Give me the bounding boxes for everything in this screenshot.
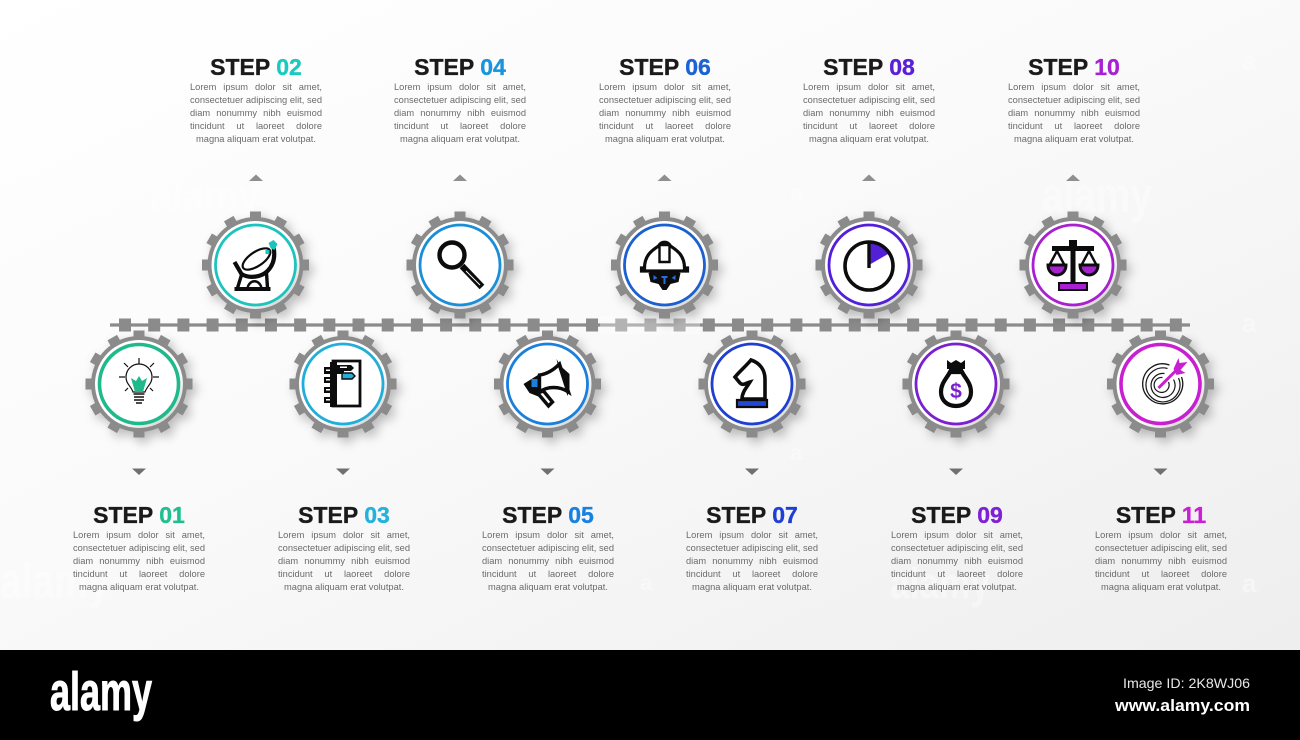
step 06 body: consectetuer adipiscing elit, sed — [599, 95, 731, 105]
step 11 text block — [1095, 502, 1227, 592]
step 01 body: Lorem ipsum dolor sit amet, — [73, 530, 205, 540]
step 07 heading: STEP 07 — [706, 502, 798, 528]
step 01 body — [73, 530, 205, 592]
gear 09 — [902, 330, 1010, 438]
step 08 body: diam nonummy nibh euismod — [803, 108, 935, 118]
watermark: a — [1242, 308, 1257, 338]
gear 05 — [494, 330, 601, 438]
step 02 body: consectetuer adipiscing elit, sed — [190, 95, 322, 105]
watermark: alamy — [1042, 167, 1152, 223]
step 06 body: magna aliquam erat volutpat. — [605, 134, 725, 144]
arrow markers, down — [132, 468, 1168, 475]
gear 10 — [1020, 212, 1126, 318]
step 08 heading: STEP 08 — [823, 54, 915, 80]
gear 04 — [406, 212, 514, 318]
step 10 heading: STEP 10 — [1028, 54, 1120, 80]
icon: notebook — [324, 361, 360, 407]
step 03 body: Lorem ipsum dolor sit amet, — [278, 530, 410, 540]
step 06 text block — [599, 54, 731, 144]
step 01 text block — [73, 502, 205, 592]
step 03 body: consectetuer adipiscing elit, sed — [278, 543, 410, 553]
step 07 body: tincidunt ut laoreet dolore — [686, 569, 818, 579]
step 08 body: magna aliquam erat volutpat. — [809, 134, 929, 144]
timeline track — [110, 316, 1190, 334]
watermark — [0, 46, 1257, 609]
step 10 body: consectetuer adipiscing elit, sed — [1008, 95, 1140, 105]
step 11 body: tincidunt ut laoreet dolore — [1095, 569, 1227, 579]
step 04 body: consectetuer adipiscing elit, sed — [394, 95, 526, 105]
step 09 body: magna aliquam erat volutpat. — [897, 582, 1017, 592]
step 10 body — [1008, 82, 1140, 144]
step 06 heading: STEP 06 — [619, 54, 711, 80]
step 07 body: consectetuer adipiscing elit, sed — [686, 543, 818, 553]
image id: Image ID: 2K8WJ06 — [1123, 675, 1250, 691]
icon: pie clock — [845, 242, 893, 290]
step 10 text block — [1008, 54, 1140, 144]
step 03 text block — [278, 502, 410, 592]
step 03 body — [278, 530, 410, 592]
watermark: a — [640, 570, 653, 595]
step 10 body: diam nonummy nibh euismod — [1008, 108, 1140, 118]
step 06 body: Lorem ipsum dolor sit amet, — [599, 82, 731, 92]
step 04 body — [394, 82, 526, 144]
gear 08 — [816, 212, 922, 318]
gear 03 — [290, 330, 396, 438]
watermark: alamy — [150, 171, 260, 220]
step 10 body: magna aliquam erat volutpat. — [1014, 134, 1134, 144]
step 01 body: diam nonummy nibh euismod — [73, 556, 205, 566]
step 09 heading: STEP 09 — [911, 502, 1003, 528]
step 05 body: Lorem ipsum dolor sit amet, — [482, 530, 614, 540]
icon: balance scales — [1048, 240, 1098, 290]
step 11 body: consectetuer adipiscing elit, sed — [1095, 543, 1227, 553]
icon: megaphone — [524, 359, 570, 406]
step 08 body: tincidunt ut laoreet dolore — [803, 121, 935, 131]
step 11 body: Lorem ipsum dolor sit amet, — [1095, 530, 1227, 540]
step 01 body: magna aliquam erat volutpat. — [79, 582, 199, 592]
gear 07 — [698, 330, 806, 438]
icon: money bag: $ — [950, 380, 962, 403]
step 06 body — [599, 82, 731, 144]
step 04 body: Lorem ipsum dolor sit amet, — [394, 82, 526, 92]
icon: light bulb — [119, 358, 159, 403]
watermark: a — [1242, 46, 1257, 76]
step 02 body: Lorem ipsum dolor sit amet, — [190, 82, 322, 92]
step 02 body: magna aliquam erat volutpat. — [196, 134, 316, 144]
website: www.alamy.com — [1114, 696, 1250, 715]
icon: target — [1143, 358, 1188, 404]
watermark: a — [1242, 568, 1257, 598]
step 09 body: tincidunt ut laoreet dolore — [891, 569, 1023, 579]
step 06 body: tincidunt ut laoreet dolore — [599, 121, 731, 131]
step 04 heading: STEP 04 — [414, 54, 506, 80]
watermark: alamy — [0, 553, 110, 609]
arrow markers, up — [249, 174, 1080, 181]
gear 02 — [202, 212, 309, 318]
step 11 body: magna aliquam erat volutpat. — [1101, 582, 1221, 592]
watermark: alamy — [890, 559, 990, 608]
step 07 body: diam nonummy nibh euismod — [686, 556, 818, 566]
step 05 body: consectetuer adipiscing elit, sed — [482, 543, 614, 553]
step 07 text block — [686, 502, 818, 592]
gear 06 — [611, 212, 718, 318]
step 10 body: Lorem ipsum dolor sit amet, — [1008, 82, 1140, 92]
step 03 body: magna aliquam erat volutpat. — [284, 582, 404, 592]
step 02 body: tincidunt ut laoreet dolore — [190, 121, 322, 131]
step 09 text block — [891, 502, 1023, 592]
icon: satellite dish — [234, 240, 278, 291]
step 09 body: diam nonummy nibh euismod — [891, 556, 1023, 566]
step 03 body: tincidunt ut laoreet dolore — [278, 569, 410, 579]
footer bar — [50, 662, 1250, 722]
icon: chess knight — [735, 360, 767, 407]
step 07 body: magna aliquam erat volutpat. — [692, 582, 812, 592]
gear 11 — [1107, 330, 1214, 438]
step 11 heading: STEP 11 — [1116, 502, 1206, 528]
step 08 body: consectetuer adipiscing elit, sed — [803, 95, 935, 105]
step 05 body — [482, 530, 614, 592]
step 01 body: consectetuer adipiscing elit, sed — [73, 543, 205, 553]
step 07 body — [686, 530, 818, 592]
step 02 heading: STEP 02 — [210, 54, 302, 80]
step 11 body — [1095, 530, 1227, 592]
step 05 heading: STEP 05 — [502, 502, 594, 528]
step 02 body: diam nonummy nibh euismod — [190, 108, 322, 118]
step 10 body: tincidunt ut laoreet dolore — [1008, 121, 1140, 131]
step 04 body: tincidunt ut laoreet dolore — [394, 121, 526, 131]
step 07 body: Lorem ipsum dolor sit amet, — [686, 530, 818, 540]
step 04 body: magna aliquam erat volutpat. — [400, 134, 520, 144]
step 05 body: diam nonummy nibh euismod — [482, 556, 614, 566]
step 04 text block — [394, 54, 526, 144]
step 09 body — [891, 530, 1023, 592]
step 06 body: diam nonummy nibh euismod — [599, 108, 731, 118]
step 01 body: tincidunt ut laoreet dolore — [73, 569, 205, 579]
step 08 body: Lorem ipsum dolor sit amet, — [803, 82, 935, 92]
icon: hard hat — [642, 242, 688, 290]
step 02 text block — [190, 54, 322, 144]
icon: magnifier — [440, 242, 482, 287]
step 09 body: consectetuer adipiscing elit, sed — [891, 543, 1023, 553]
step 08 body — [803, 82, 935, 144]
step 01 heading: STEP 01 — [93, 502, 185, 528]
step 03 body: diam nonummy nibh euismod — [278, 556, 410, 566]
step 08 text block — [803, 54, 935, 144]
gear 01 — [86, 330, 192, 438]
step 09 body: Lorem ipsum dolor sit amet, — [891, 530, 1023, 540]
watermark: a — [790, 440, 803, 465]
step 05 body: tincidunt ut laoreet dolore — [482, 569, 614, 579]
step 11 body: diam nonummy nibh euismod — [1095, 556, 1227, 566]
step 05 text block — [482, 502, 614, 592]
step 02 body — [190, 82, 322, 144]
step 04 body: diam nonummy nibh euismod — [394, 108, 526, 118]
alamy logo: alamy — [50, 662, 152, 722]
watermark: a — [790, 180, 803, 205]
step 05 body: magna aliquam erat volutpat. — [488, 582, 608, 592]
step 03 heading: STEP 03 — [298, 502, 390, 528]
